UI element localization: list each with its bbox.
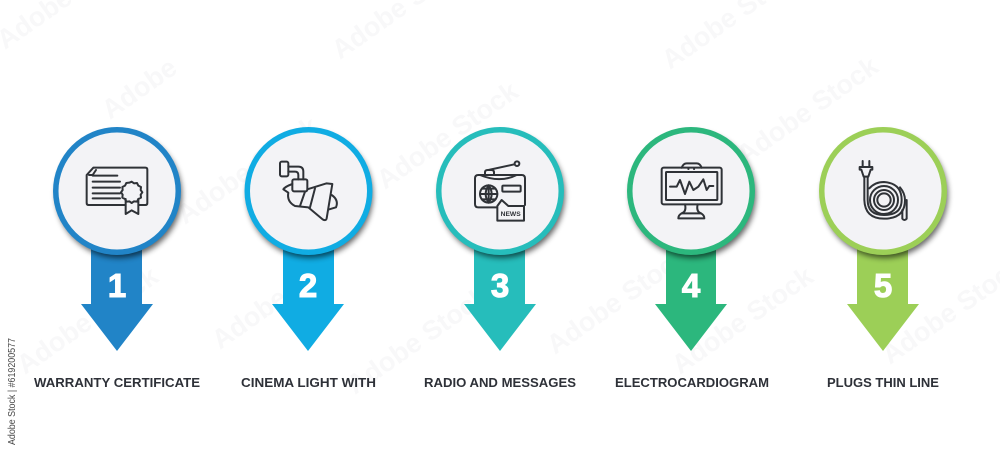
watermark: Adobe Stock (171, 110, 324, 230)
circle 5 (819, 127, 948, 258)
watermark: Adobe Stock (541, 240, 694, 360)
circle 1 (53, 127, 182, 258)
step 2: cinema light (241, 127, 376, 390)
watermark: Adobe (206, 282, 292, 355)
number 4: 4 (682, 267, 701, 304)
label 3: RADIO AND MESSAGES (424, 376, 576, 390)
watermark: Adobe Stock (666, 260, 819, 380)
arrow 5 (847, 240, 919, 351)
watermark: Adobe (96, 52, 182, 125)
icon: radio news: NEWS (501, 211, 521, 218)
circle 2 (244, 127, 373, 258)
label 2: CINEMA LIGHT WITH (241, 376, 376, 390)
step 4: electrocardiogram (615, 127, 769, 390)
number 1: 1 (108, 267, 126, 304)
label 5: PLUGS THIN LINE (827, 376, 939, 390)
number 2: 2 (299, 267, 317, 304)
icon: certificate (87, 168, 147, 214)
label 1: WARRANTY CERTIFICATE (34, 376, 200, 390)
step 3: radio (424, 127, 576, 390)
number 5: 5 (874, 267, 892, 304)
step 1: warranty certificate (34, 127, 200, 390)
circle 3 (436, 127, 565, 258)
watermark: Adobe Stock (11, 260, 164, 380)
watermark: Adobe Stock (371, 75, 524, 195)
step 5: plugs (819, 127, 948, 390)
circle 4 (627, 127, 756, 258)
arrow 1 (81, 240, 153, 351)
icon: plug cable (860, 161, 907, 220)
arrow 4 (655, 240, 727, 351)
icon: cinema light (280, 162, 337, 220)
number 3: 3 (491, 267, 509, 304)
stock id: Adobe Stock | #619200577 (6, 338, 18, 445)
icon: ecg monitor (662, 163, 722, 218)
watermark: Adobe Stock (731, 50, 884, 170)
arrow 2 (272, 240, 344, 351)
watermark: Adobe Stock (341, 280, 494, 400)
arrow 3 (464, 240, 536, 351)
label 4: ELECTROCARDIOGRAM (615, 376, 769, 390)
icon: radio news (475, 161, 525, 221)
